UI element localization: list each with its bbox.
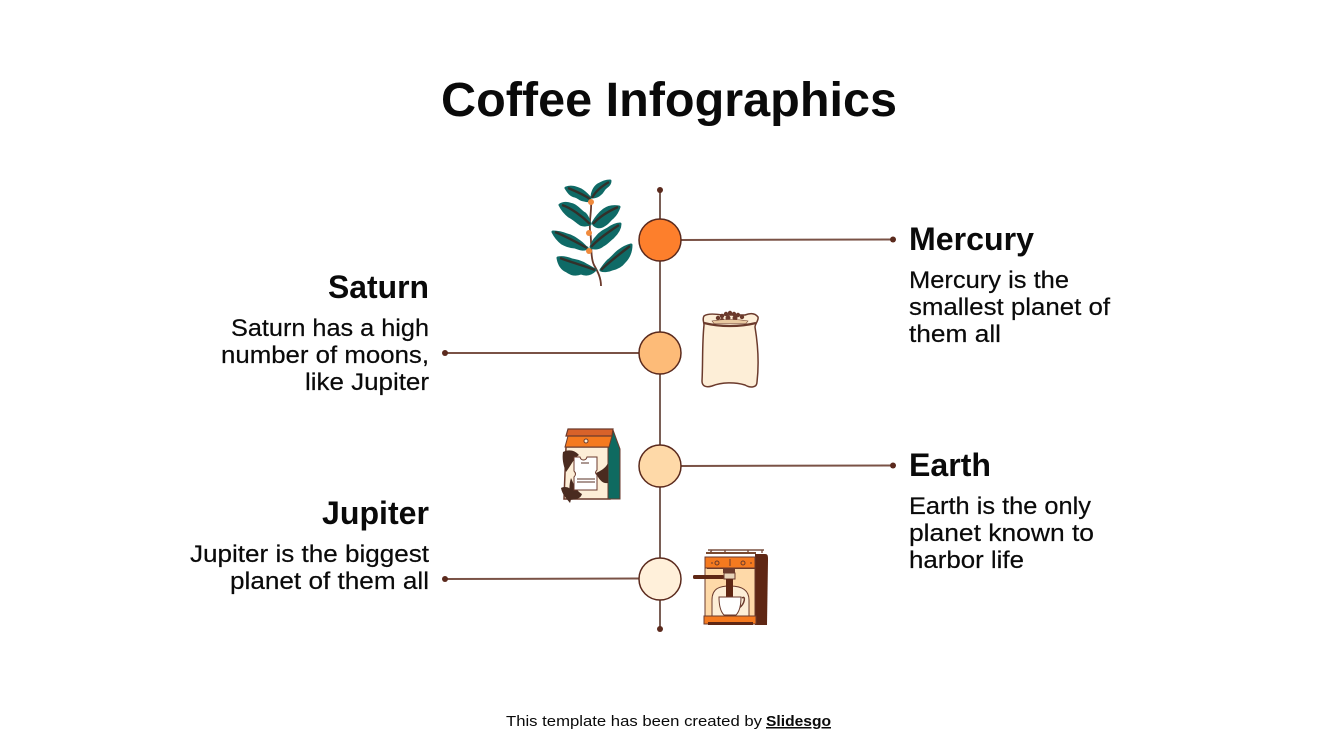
text block: mercury: Mercury is the [909,267,1069,294]
text block: mercury: them all [909,321,1001,348]
icon: coffee plant [553,181,631,286]
text block: saturn: number of moons, [221,342,429,369]
text block: earth: Earth [909,447,991,483]
text block: mercury: smallest planet of [909,294,1110,321]
panel: jupiter connector and node [442,558,681,600]
text block: earth: harbor life [909,547,1024,574]
text block: mercury [909,221,1110,348]
icon: coffee bag [561,429,620,503]
text block: saturn: Saturn has a high [231,315,429,342]
text block: jupiter [190,495,429,595]
text block: mercury: Mercury [909,221,1034,257]
text block: jupiter: Jupiter is the biggest [190,541,429,568]
footer credit: Slidesgo [766,713,831,730]
text block: jupiter: planet of them all [230,568,429,595]
text block: earth: planet known to [909,520,1094,547]
text block: saturn: Saturn [328,269,429,305]
panel: earth connector and node [639,445,896,487]
footer credit: This template has been created by [506,713,763,730]
timeline spine [657,187,663,632]
text block: earth: Earth is the only [909,493,1091,520]
icon: coffee sack [702,311,758,387]
text block: earth [909,447,1094,574]
text block: saturn: like Jupiter [305,369,429,396]
icon: espresso machine [693,550,768,625]
panel: saturn connector and node [442,332,681,374]
text block: jupiter: Jupiter [322,495,429,531]
text block: saturn [221,269,429,396]
panel: mercury connector and node [639,219,896,261]
title: Coffee Infographics [441,74,897,127]
